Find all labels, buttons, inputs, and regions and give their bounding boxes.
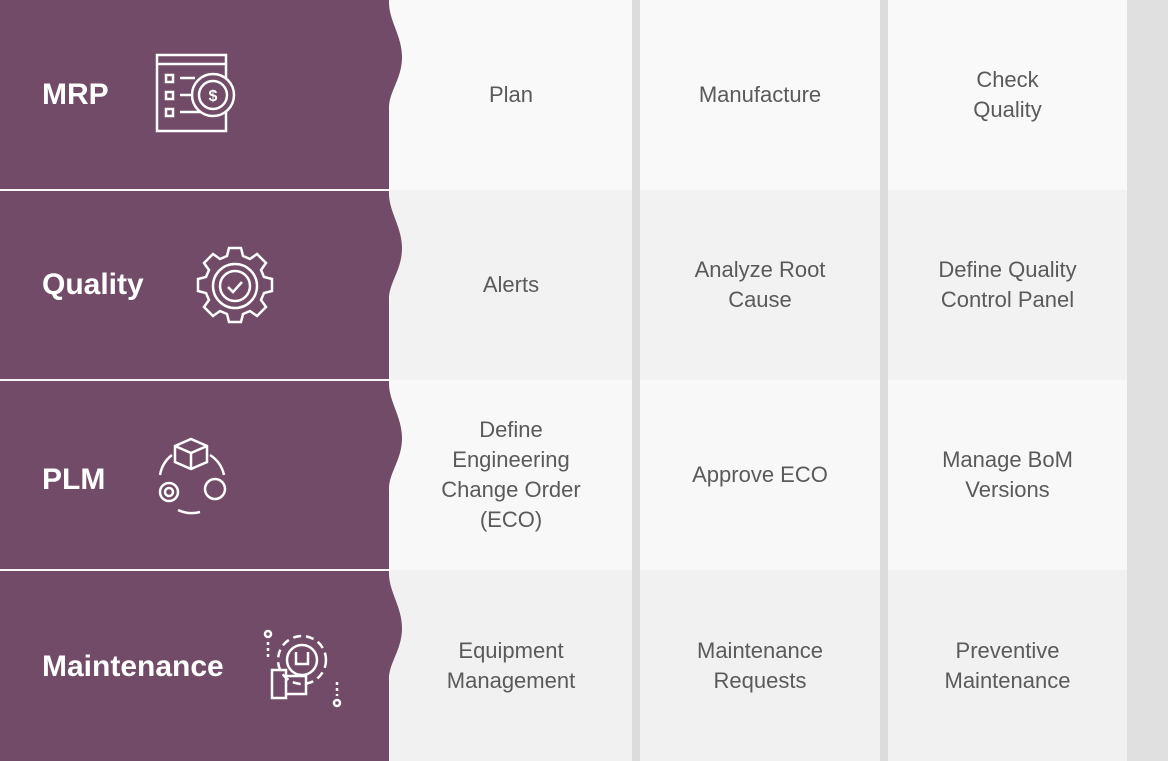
row Maintenance cells [447, 638, 1070, 692]
icon: MRP [157, 55, 234, 131]
icon: Quality [198, 248, 272, 322]
label: PLM: PLM [42, 463, 105, 496]
row Quality cells: Cause [728, 287, 792, 312]
icon: MRP: $ [209, 88, 218, 105]
row MRP cells: Check [976, 67, 1039, 92]
label: Maintenance: Maintenance [42, 650, 224, 683]
label: Quality: Quality [42, 268, 144, 301]
row Maintenance cells: Equipment [458, 638, 564, 662]
row PLM cells [441, 417, 1073, 532]
row MRP cells: Plan [489, 82, 533, 107]
row MRP cells [489, 67, 1042, 122]
row PLM cells: Versions [965, 477, 1050, 502]
label: MRP: MRP [42, 78, 109, 111]
row Maintenance cells: Maintenance [944, 668, 1070, 692]
icon: PLM [160, 439, 225, 513]
row Quality cells: Define Quality [938, 257, 1077, 282]
row Maintenance cells: Maintenance [697, 638, 823, 662]
row Maintenance cells: Management [447, 668, 575, 692]
row Quality cells: Alerts [483, 272, 539, 297]
icon: Maintenance [265, 631, 340, 706]
row PLM cells: Define [479, 417, 543, 442]
row MRP cells: Quality [973, 97, 1042, 122]
row MRP cells: Manufacture [699, 82, 821, 107]
row Quality cells [483, 257, 1077, 312]
row Maintenance cells: Preventive [956, 638, 1059, 662]
row Quality cells: Analyze Root [695, 257, 825, 282]
left purple column [0, 0, 402, 761]
row PLM cells: Manage BoM [942, 447, 1073, 472]
row PLM cells: Approve ECO [692, 462, 828, 487]
row Quality cells: Control Panel [941, 287, 1074, 312]
row PLM cells: (ECO) [480, 507, 542, 532]
row PLM cells: Change Order [441, 477, 581, 502]
row PLM cells: Engineering [452, 447, 570, 472]
row Maintenance cells: Requests [714, 668, 806, 692]
